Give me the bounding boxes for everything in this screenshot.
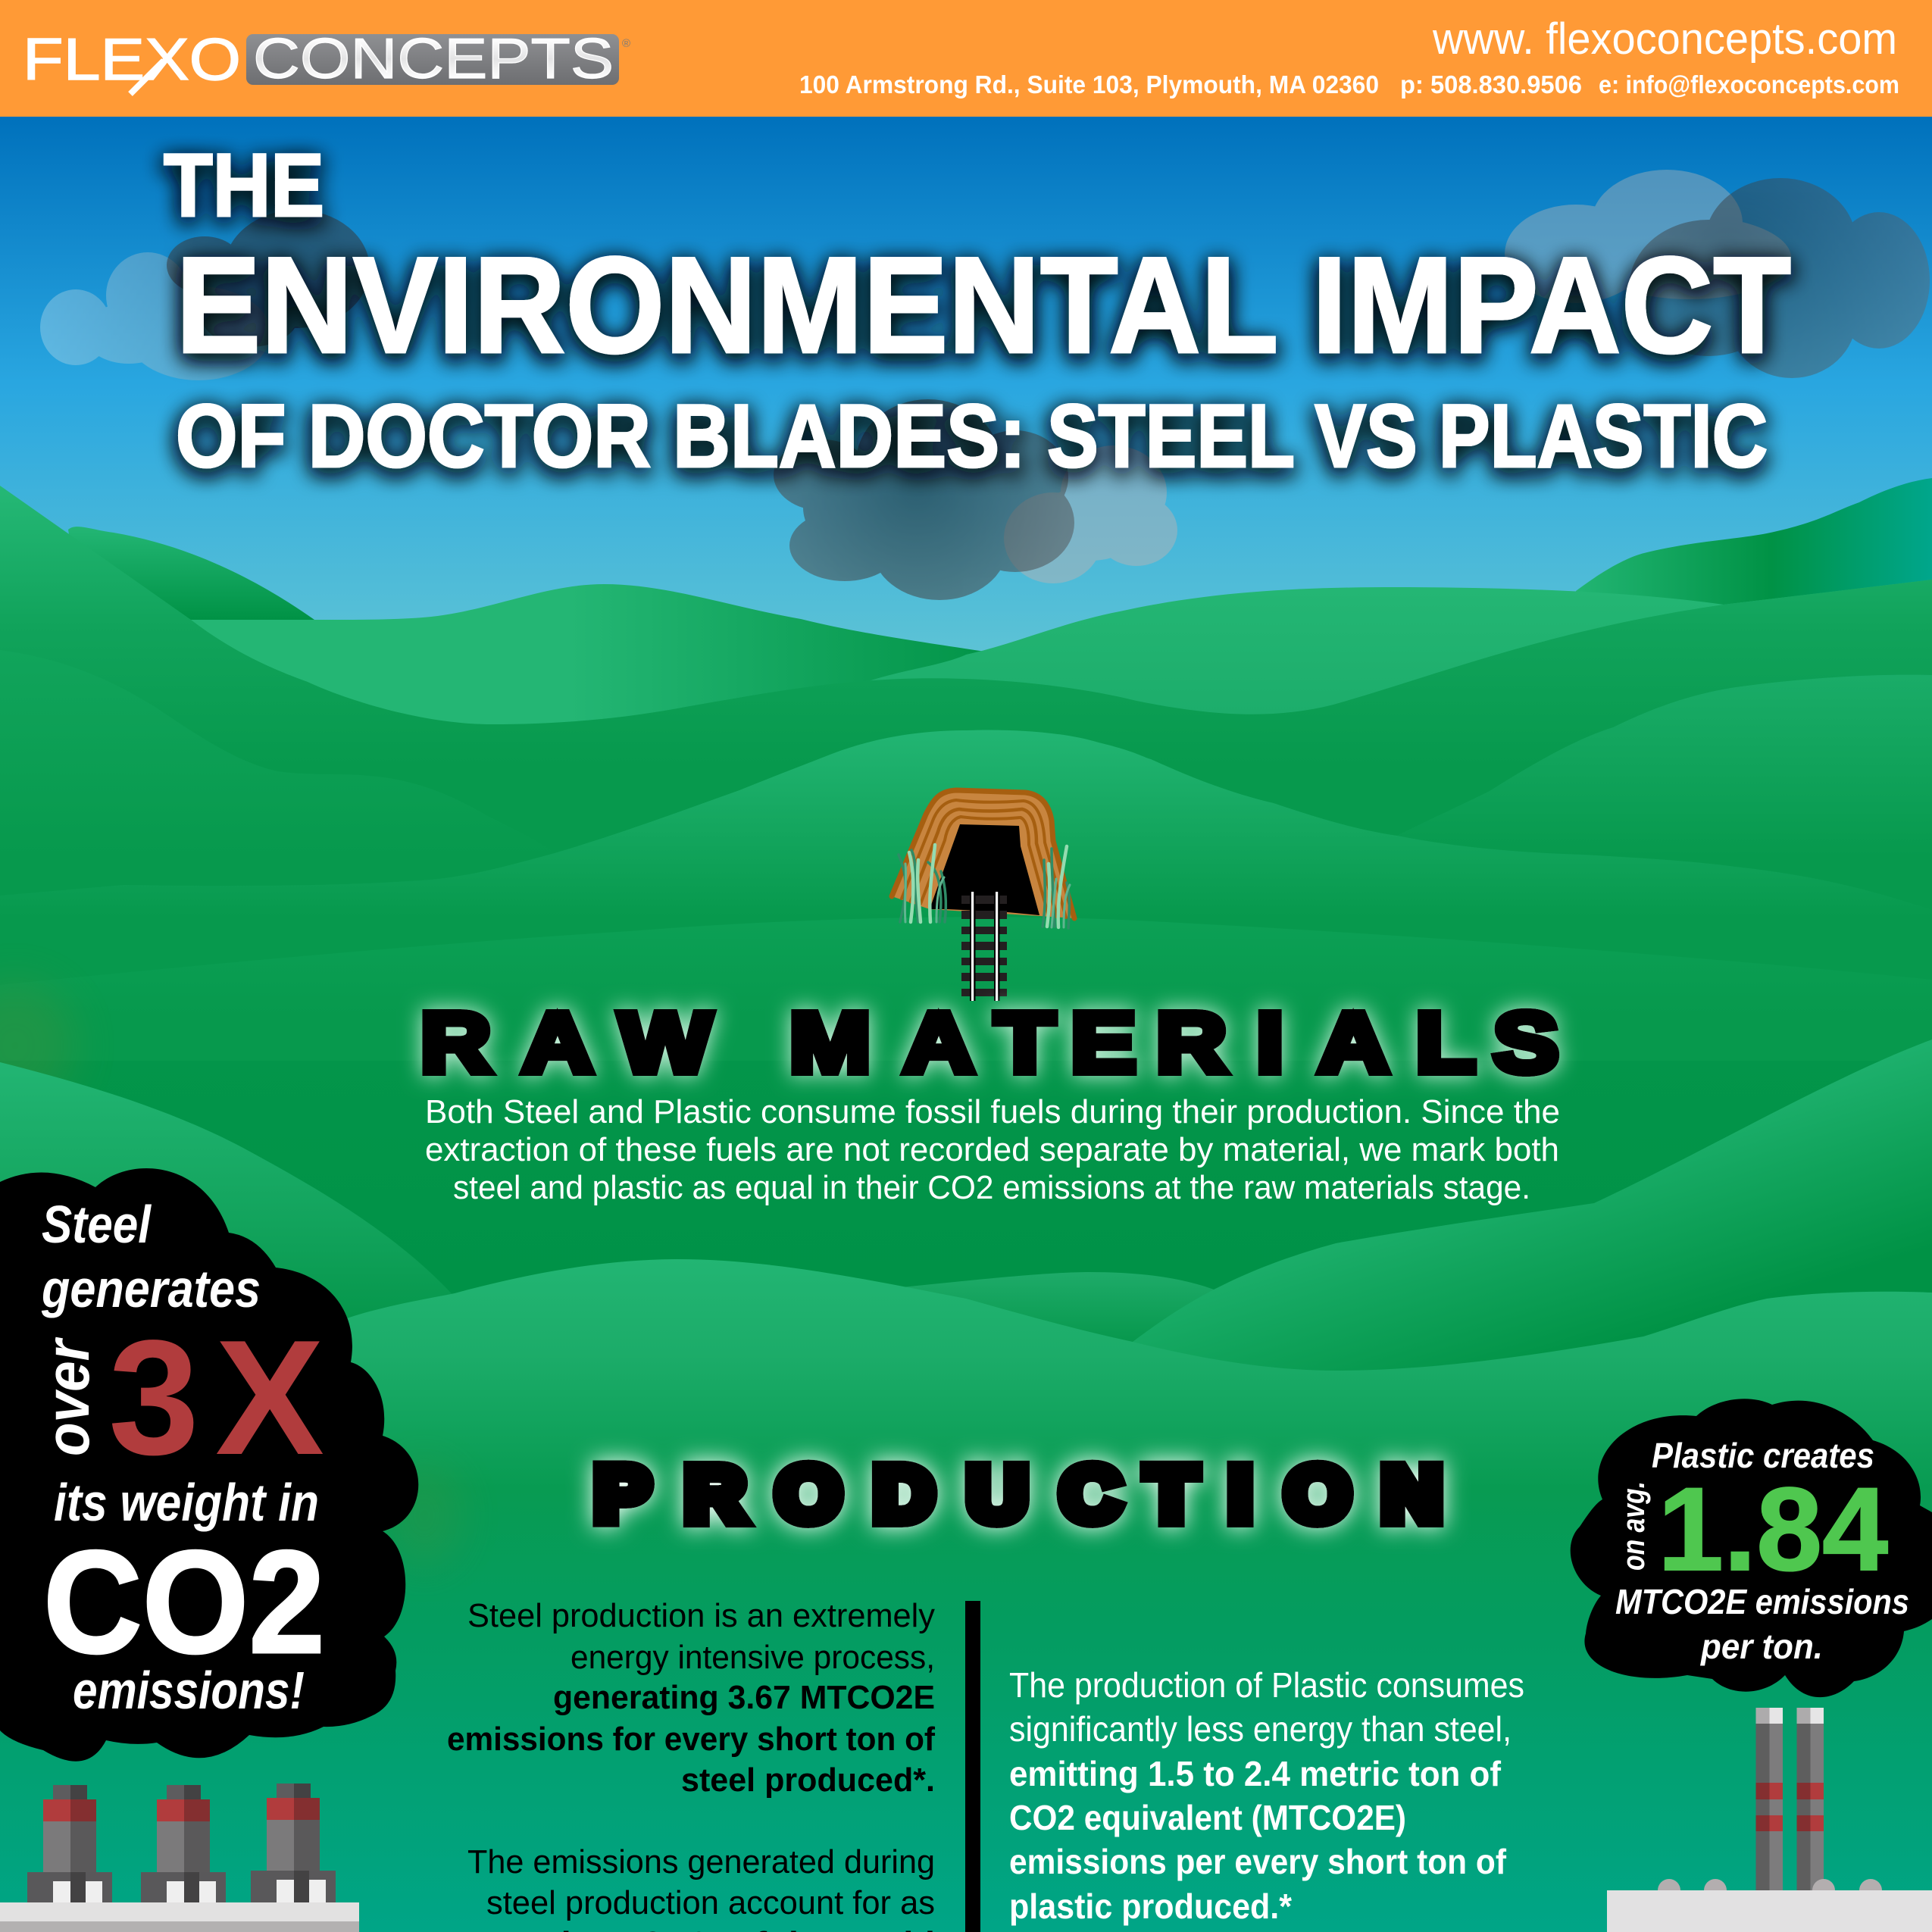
title bbox=[164, 136, 1791, 486]
title: STEEL VS PLASTIC bbox=[1047, 386, 1768, 486]
text block: plastic production: emitting 1.5 to 2.4 metric ton of bbox=[1009, 1754, 1502, 1793]
factory unit 3 bbox=[251, 1784, 336, 1902]
text block: steel production: energy intensive process, bbox=[571, 1639, 935, 1676]
website: www. flexoconcepts.com bbox=[1432, 14, 1897, 64]
divider bar bbox=[965, 1601, 980, 1932]
text block: raw materials description: Both Steel and Plastic consume fossil fuels during their production. Since the bbox=[425, 1093, 1560, 1130]
rail ties bbox=[961, 896, 1007, 996]
roof domes bbox=[1658, 1879, 1882, 1902]
title: THE bbox=[164, 136, 324, 236]
cloud: upper left dark bbox=[167, 210, 370, 347]
logo: FlexoConcepts: ® bbox=[622, 37, 630, 50]
contact details: 100 Armstrong Rd., Suite 103, Plymouth, MA 02360 bbox=[799, 70, 1379, 98]
callout: plastic emissions cloud bbox=[1571, 1399, 1932, 1697]
logo: FlexoConcepts: FLEXO bbox=[23, 26, 241, 92]
contact details: e: info@flexoconcepts.com bbox=[1599, 70, 1899, 98]
cloud: upper right dark bbox=[1629, 178, 1930, 378]
callout: plastic emissions cloud: per ton. bbox=[1699, 1627, 1823, 1666]
text block: plastic production: plastic produced.* bbox=[1009, 1887, 1292, 1926]
text block: plastic production: significantly less energy than steel, bbox=[1009, 1709, 1512, 1749]
cloud: center dark bbox=[774, 399, 1074, 600]
grass tufts bbox=[899, 845, 1070, 928]
callout: steel emissions cloud: its weight in bbox=[54, 1473, 319, 1532]
callout: steel emissions cloud: Steel bbox=[42, 1195, 152, 1254]
callout: plastic emissions cloud: Plastic creates bbox=[1652, 1436, 1874, 1475]
callout: steel emissions cloud: 3X bbox=[108, 1305, 324, 1489]
cloud: center light bbox=[1004, 445, 1177, 583]
text block: steel production: generating 3.67 MTCO2E bbox=[553, 1679, 935, 1716]
callout: steel emissions cloud: generates bbox=[41, 1259, 261, 1318]
callout: plastic emissions cloud: MTCO2E emissions bbox=[1615, 1582, 1909, 1621]
text block: steel production: steel production account for as bbox=[486, 1884, 935, 1921]
text block: raw materials description bbox=[425, 1093, 1560, 1206]
stack 2 bbox=[1797, 1708, 1824, 1890]
callout: steel emissions cloud: CO2 bbox=[43, 1520, 325, 1683]
text block: plastic production: CO2 equivalent (MTCO2E) bbox=[1009, 1798, 1406, 1837]
header bar bbox=[0, 0, 1932, 117]
contact details bbox=[799, 70, 1899, 98]
text block: plastic production: emissions per every short ton of bbox=[1009, 1842, 1507, 1881]
callout: steel emissions cloud: emissions! bbox=[73, 1661, 305, 1720]
title: ENVIRONMENTAL IMPACT bbox=[176, 229, 1791, 382]
title: OF DOCTOR BLADES: bbox=[176, 386, 1026, 486]
callout: steel emissions cloud bbox=[0, 1168, 418, 1762]
text block: raw materials description: steel and plastic as equal in their CO2 emissions at the raw materials stage. bbox=[453, 1169, 1530, 1206]
factory unit 1 bbox=[27, 1785, 112, 1902]
landscape: rolling green hills bbox=[0, 478, 1932, 1932]
cloud: upper right light bbox=[1505, 170, 1791, 303]
sky background bbox=[0, 117, 1932, 723]
callout: plastic emissions cloud: 1.84 bbox=[1658, 1464, 1888, 1596]
stack 1 bbox=[1756, 1708, 1783, 1890]
text block: steel production: Steel production is an extremely bbox=[467, 1597, 935, 1634]
text block: raw materials description: extraction of these fuels are not recorded separate by material, we mark both bbox=[425, 1131, 1559, 1168]
factory platform bbox=[0, 1902, 359, 1932]
heading: production: PRODUCTION bbox=[595, 1452, 1442, 1537]
cloud: upper left light bbox=[40, 252, 270, 380]
heading: raw materials: RAW MATERIALS bbox=[420, 995, 1558, 1090]
icon: steel factory smokestacks bbox=[0, 1784, 359, 1932]
text block: steel production: emissions for every short ton of bbox=[447, 1721, 935, 1758]
text block: steel production: The emissions generated during bbox=[467, 1843, 935, 1880]
contact details: p: 508.830.9506 bbox=[1400, 70, 1582, 98]
text block: steel production: steel produced*. bbox=[681, 1762, 935, 1799]
text block: plastic production bbox=[1009, 1665, 1524, 1926]
callout: plastic emissions cloud: on avg. bbox=[1615, 1481, 1651, 1571]
text block: steel production bbox=[447, 1597, 935, 1932]
rails bbox=[970, 892, 1000, 1001]
icon: mine entrance with rail tracks bbox=[892, 790, 1074, 1001]
logo: FlexoConcepts: CONCEPTS bbox=[253, 27, 614, 90]
factory unit 2 bbox=[141, 1785, 226, 1902]
callout: steel emissions cloud: over bbox=[33, 1336, 102, 1456]
logo: FlexoConcepts bbox=[23, 26, 630, 94]
icon: plastic factory smokestacks bbox=[1607, 1708, 1932, 1932]
text block: plastic production: The production of Plastic consumes bbox=[1009, 1665, 1524, 1705]
factory platform bbox=[1607, 1890, 1932, 1932]
